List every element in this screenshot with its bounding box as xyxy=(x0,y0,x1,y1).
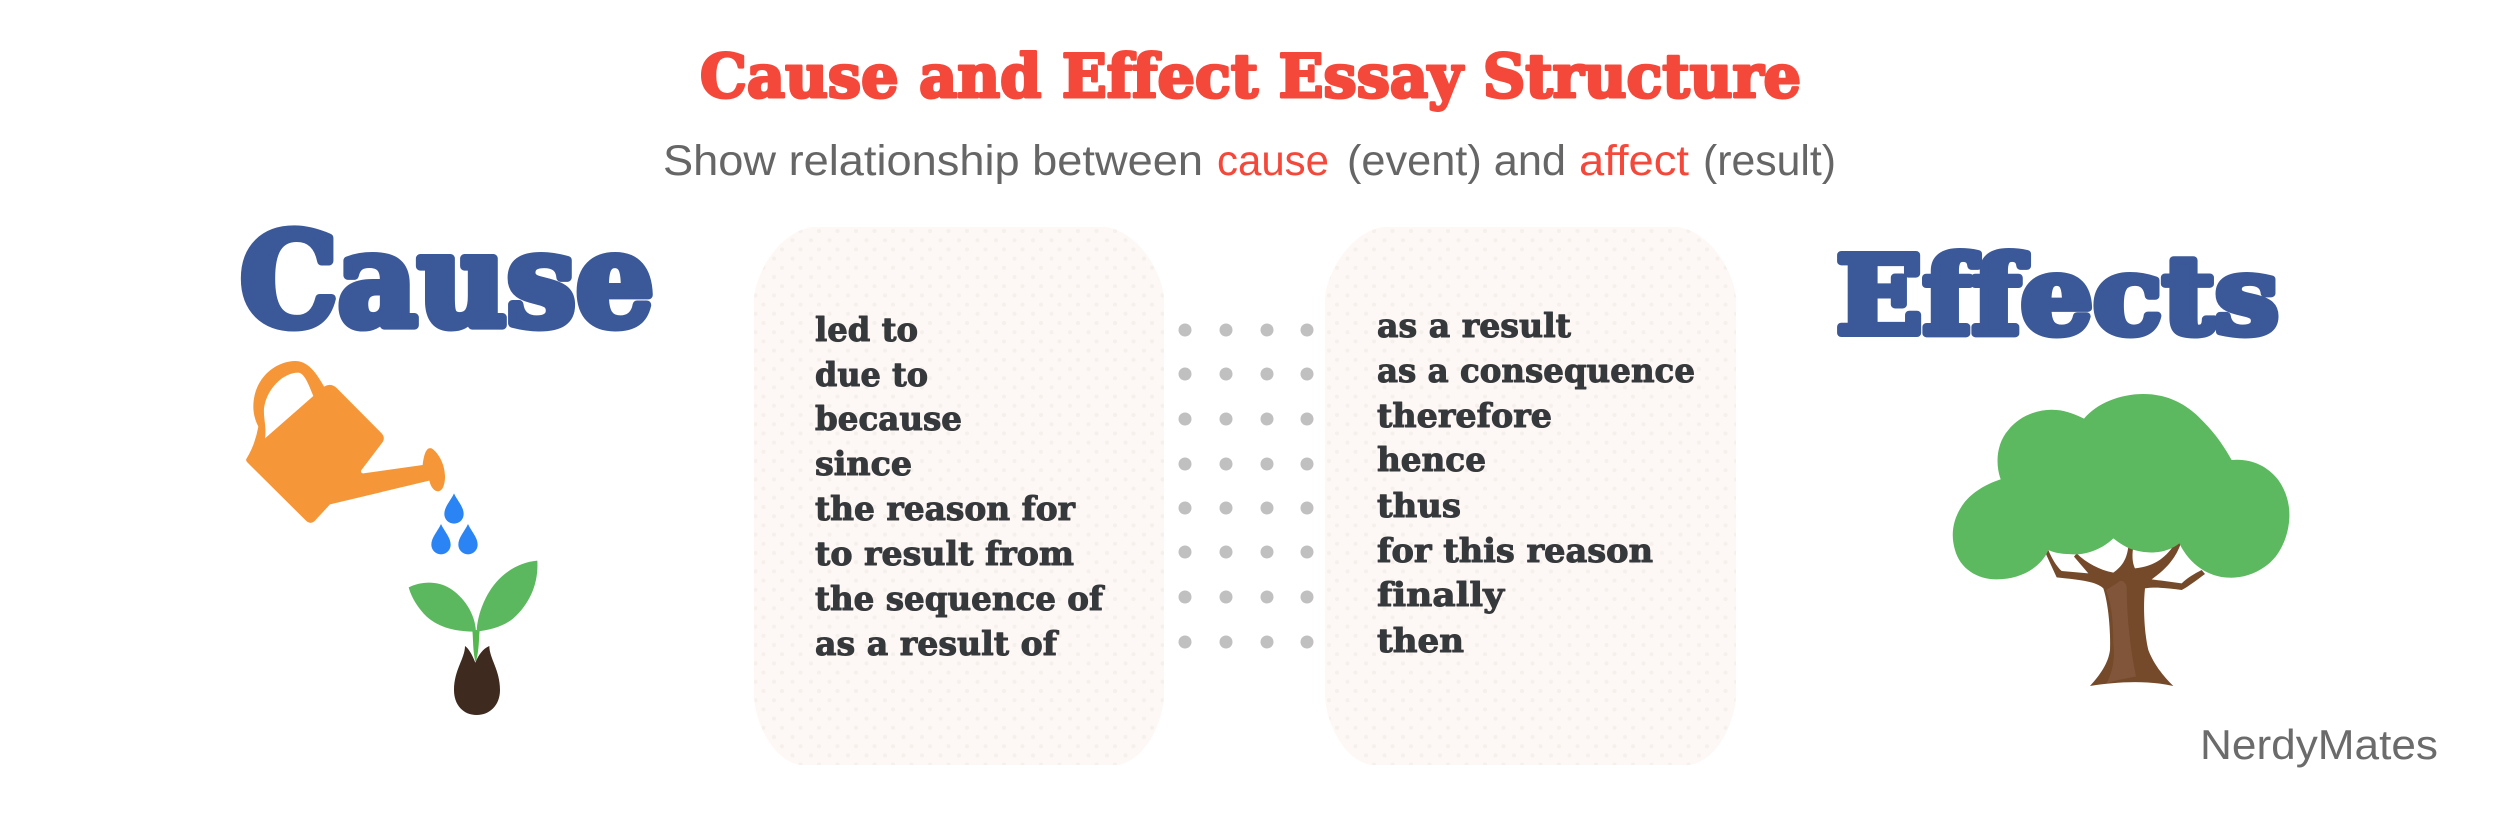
subtitle: cause xyxy=(1217,137,1329,185)
subtitle: affect xyxy=(1579,137,1689,185)
cause word list: due to xyxy=(815,355,928,394)
subtitle: (event) and xyxy=(1347,137,1566,185)
cause word list: led to xyxy=(815,310,918,349)
cause word list: the reason for xyxy=(815,489,1076,528)
connector dots xyxy=(1178,324,1314,648)
effect word list: as a consequence xyxy=(1377,351,1695,390)
effect word list: finally xyxy=(1377,575,1505,614)
effect word list: then xyxy=(1377,621,1464,660)
cause word list: because xyxy=(815,399,962,438)
cause word list: the sequence of xyxy=(815,579,1105,618)
icon: tree xyxy=(1953,394,2289,686)
cause word list xyxy=(815,310,1105,663)
subtitle: (result) xyxy=(1703,137,1836,185)
effect word list: therefore xyxy=(1377,396,1552,435)
icon: watering can xyxy=(246,361,445,523)
subtitle: Show relationship between xyxy=(663,137,1203,185)
icon: sprout in soil xyxy=(409,561,537,715)
cause word list: to result from xyxy=(815,534,1074,573)
effect word list: hence xyxy=(1377,440,1486,479)
panel: cause words xyxy=(754,227,1164,765)
brand: NerdyMates: NerdyMates xyxy=(2200,721,2438,768)
title: Cause and Effect Essay Structure xyxy=(700,42,1801,112)
heading: Cause: Cause xyxy=(240,206,654,356)
heading: Effects: Effects xyxy=(1836,234,2279,359)
icon: water drops xyxy=(431,493,478,554)
panel: effect words xyxy=(1325,227,1736,765)
effect word list xyxy=(1377,306,1695,660)
cause word list: as a result of xyxy=(815,624,1059,663)
effect word list: for this reason xyxy=(1377,531,1653,570)
subtitle xyxy=(663,137,1836,185)
cause word list: since xyxy=(815,444,912,483)
effect word list: as a result xyxy=(1377,306,1572,345)
effect word list: thus xyxy=(1377,486,1461,525)
